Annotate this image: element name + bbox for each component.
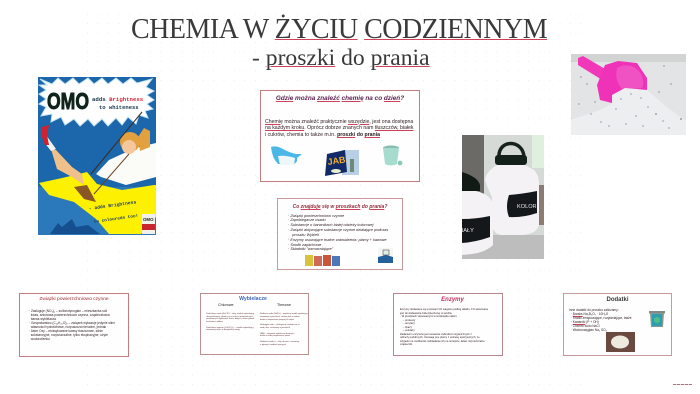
ingredient list: · Związki aktywujące substancje czynne działające podczas — [288, 228, 388, 232]
ingredient list: · Zapobiegacze osadu — [288, 218, 326, 222]
icon: blue detergent — [271, 146, 302, 165]
panel text: barwa wybielacza — [31, 316, 56, 320]
subtitle: - proszki do prania — [252, 45, 430, 71]
image: OMO poster — [38, 77, 156, 235]
image: storage jars — [462, 135, 544, 259]
panel: enzymes — [393, 293, 503, 356]
panel text: – amylazy — [403, 322, 415, 325]
image: powder dish — [606, 332, 635, 352]
panel: additives — [563, 293, 672, 356]
right column text: w płynnych środkach piorących — [260, 344, 286, 346]
panel text: · Chlorek sodu NaCl — [571, 324, 599, 328]
icon: detergent box — [325, 150, 359, 176]
panel: where chemistry is found — [260, 90, 420, 182]
panel text: względu na możliwość rozkładania ich na mniejsze, łatwo rozpuszczalne — [400, 340, 485, 342]
right column text: działa w niskiej temperaturze prania — [260, 335, 290, 337]
image: OMO poster: to whiteness — [99, 104, 139, 111]
panel text: Chemię można znaleźć praktycznie wszędzie, jest ona dostępna — [265, 118, 413, 124]
right column text — [259, 312, 308, 346]
image: OMO poster: OMO — [47, 88, 89, 114]
hair and face — [120, 132, 140, 152]
panel heading: Wybielacze — [239, 296, 267, 302]
panel heading: Dodatki — [606, 297, 628, 303]
panel: what is in detergents — [277, 198, 403, 270]
icon: green tub — [383, 146, 402, 166]
panel text: substancyjne, rozpuszczalne, tylko ekspiracyjne, użyte — [31, 332, 108, 336]
panel text: Inne dodatki do proszku zaliczamy: — [569, 308, 619, 312]
image: OMO poster: OMO — [143, 217, 154, 222]
ingredient list: · Składniki "wzmacniające" — [288, 247, 333, 251]
panel heading: Związki powierzchniowo czynne — [39, 296, 109, 302]
blouse — [96, 143, 156, 185]
ingredient list: · Substancje o barwnikach białej odzieży kolorowej — [288, 223, 373, 227]
skirt — [39, 172, 156, 234]
panel text — [265, 118, 414, 138]
panel text: odzieży podobnych. Usuwają one plamy z potrawy spożywczych, ze — [400, 336, 480, 339]
icon: detergent box: JAB — [327, 155, 347, 167]
ingredient list — [288, 214, 388, 251]
panel text: · Gospodarstwo (C₁₂H₂₅O)₂ – związek wykazuje jedynie silne — [29, 320, 115, 324]
right column text: · Nadwęglan sodu – ekologiczny, rozkłada się na — [259, 324, 300, 326]
decorative logo: bottom right mark — [673, 384, 692, 385]
panel text: kwas, anionowa powierzchniowo czynna, cząsteczkowa — [31, 312, 110, 316]
panel text: Zadaniem enzymów jest usuwanie zabrudzeń organicznych z — [400, 332, 472, 336]
image: OMO poster: - adds Brightness — [88, 199, 137, 212]
panel text: wodorotlenku — [31, 336, 50, 340]
icon: detergent container — [649, 311, 665, 327]
ingredient list: · Środki zapachowe — [288, 243, 321, 247]
panel text: – proteazy — [403, 318, 415, 322]
left column text: stosowany także w dezynfekcji wody — [206, 329, 240, 331]
seat — [74, 185, 96, 202]
panel text: cząsteczki — [400, 343, 412, 346]
panel text: · Boraks Na₂B₄O₇ · 10H₂O — [571, 312, 608, 316]
panel text — [400, 308, 488, 346]
panel text: · Aster Oxy – etoksylowane kwasy tłuszczowe, silnie — [29, 328, 103, 332]
left column text: uszkadzać włókna — [206, 321, 223, 323]
panel text: – lipazy — [403, 326, 412, 328]
panel heading: Enzymy — [441, 297, 464, 303]
panel text: · Środki zmiękczające, rozjaśniające, także — [571, 316, 632, 320]
ingredient list: proszku Wybieli — [292, 233, 319, 237]
panel text: · Kwaśniki (P + OH) — [571, 320, 599, 324]
left column text — [206, 312, 254, 331]
panel text — [29, 308, 115, 340]
rope — [91, 112, 142, 174]
ingredient list: · Związki powierzchniowo czynne — [288, 214, 344, 218]
grass — [50, 219, 100, 234]
left column text: Podchloryn wapnia (Ca(ClO)₂) – środek wybielający — [206, 327, 254, 329]
panel heading: Co znajduje się w proszkach do prania? — [293, 204, 387, 210]
title: CHEMIA W ŻYCIU CODZIENNYM — [131, 14, 547, 45]
panel text: własności hydrofobowe, rozpuszcza nierudne, jednak — [31, 324, 106, 328]
panel text: · Wodorowęglan Na₂ SO₄ — [571, 328, 607, 332]
icon: detergent packs — [305, 255, 340, 266]
right column text: · Nadboran sodu (NaBO₃) – popularny środek wybielający — [259, 313, 308, 315]
right column text: · TAED – aktywator wybielaczy tlenowych, — [259, 333, 294, 335]
starburst — [39, 78, 154, 126]
image: OMO poster: adds Brightness — [92, 96, 144, 103]
panel: bleaches — [200, 293, 309, 355]
image: storage jars: KOLOR — [517, 204, 537, 210]
panel text: i cukrów, chemia to także m.in. proszki do prania — [265, 132, 380, 138]
panel text: Enzymy dodawane są w postaci 1% wagowo podług składu, 1% stosowane — [400, 308, 488, 311]
panel text: · W proszkach stosowanymi w środowisku takim: — [400, 315, 457, 318]
right column text: stosowany w proszkach, uwalnia tlen w wodzie, — [260, 316, 300, 318]
image: OMO poster: to coloureds too! — [94, 214, 139, 225]
column heading: oxygen: Tlenowe — [277, 303, 291, 307]
column heading: chlorine: Chlorowe — [218, 303, 234, 307]
panel text: · Zasługuje (NO₃)₂ – sulfonotynuglan – mieszkanka soli — [29, 308, 107, 312]
right column text: wodę i tlen, stosowany w proszkach — [260, 327, 290, 329]
panel text — [569, 308, 632, 332]
left column text: i dezynfekujący, działa już w niskich temperaturach, — [206, 316, 253, 318]
image: pink scoop in powder — [571, 54, 686, 135]
panel text: na każdym kroku. Oprócz dobrze znanych nam tłuszczów, białek — [265, 125, 414, 131]
icon: washing symbol box — [378, 248, 393, 263]
ingredient list: · Enzymy usuwające trudne zabrudzenia: plamy + kawowe — [288, 238, 387, 242]
left column text: stosowany w wybielaniu tkanin białych, może jednak — [206, 318, 254, 320]
leg — [51, 149, 84, 185]
right column text: działa w temperaturze powyżej 60 stopni — [260, 319, 294, 321]
left column text: Podchloryn sodu (NaClO) – silny środek wybielający — [206, 313, 254, 315]
panel text: jest do dodawania zabezpieczonej w wodzie — [400, 312, 452, 314]
panel text: – celulazy — [403, 329, 415, 332]
right column text: · Nadtlenek wodoru – silny utleniacz, stosowany — [259, 341, 299, 343]
panel: surfactants — [19, 293, 129, 357]
panel heading: Gdzie można znaleźć chemię na co dzień? — [276, 94, 404, 102]
